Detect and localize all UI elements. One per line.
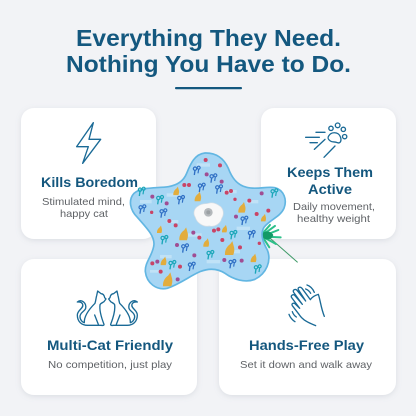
title: Nothing You Have to Do. <box>66 51 351 77</box>
text: hands-free description: Set it down and walk away <box>240 359 373 371</box>
heading: keeps them active: Active <box>308 182 353 197</box>
title underline <box>175 87 242 89</box>
feather wand <box>261 225 298 262</box>
heading: keeps them active <box>287 165 373 197</box>
icon: two cats <box>77 291 137 325</box>
heading: keeps them active: Keeps Them <box>287 165 373 180</box>
heading: kills boredom: Kills Boredom <box>41 175 138 190</box>
icon: lightning bolt <box>77 123 101 163</box>
fabric pattern: red flowers <box>150 158 270 274</box>
text: kills boredom description <box>42 196 125 220</box>
text: kills boredom description: Stimulated mind, <box>42 196 125 208</box>
text: multi-cat description: No competition, just play <box>48 359 173 371</box>
heading: multi-cat friendly: Multi-Cat Friendly <box>47 338 174 353</box>
panel: multi-cat friendly <box>21 259 197 395</box>
icon: running paw <box>306 123 347 157</box>
product: star-shaped cat toy <box>130 153 298 289</box>
text: keeps them active description: healthy weight <box>297 213 370 225</box>
panel: kills boredom <box>21 108 156 239</box>
panel: keeps them active <box>261 108 396 239</box>
title: Everything They Need. <box>76 25 341 51</box>
text: keeps them active description: Daily movement, <box>293 201 375 213</box>
toy center button <box>194 203 223 226</box>
toy fabric body <box>130 153 285 289</box>
fabric pattern: teal keys <box>138 187 278 274</box>
fabric pattern: purple flowers <box>150 172 264 281</box>
fabric pattern: blue keys <box>139 166 255 271</box>
icon: waving hand <box>289 285 324 326</box>
text: kills boredom description: happy cat <box>60 208 108 220</box>
fabric highlights <box>140 163 258 273</box>
fabric pattern: gold cats <box>157 187 266 286</box>
panel: hands-free play <box>219 259 396 395</box>
title <box>66 25 351 77</box>
text: keeps them active description <box>293 201 375 225</box>
heading: hands-free play: Hands-Free Play <box>249 338 365 353</box>
